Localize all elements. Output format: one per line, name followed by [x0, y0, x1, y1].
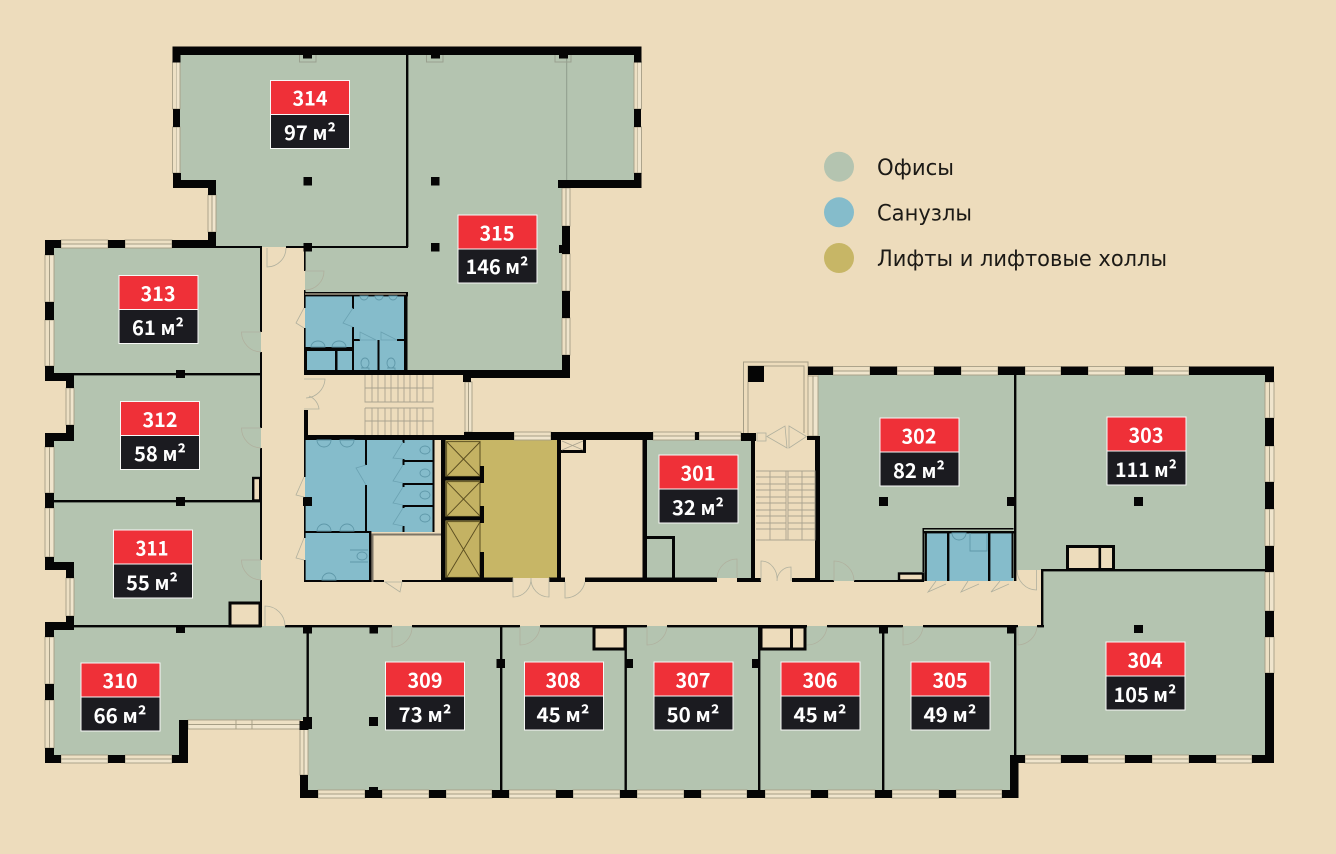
- legend item: offices: [824, 152, 954, 182]
- restroom 302 walls: [922, 528, 1014, 581]
- label 307: [654, 662, 734, 730]
- elevator shafts: [446, 442, 480, 578]
- label 313: [118, 275, 198, 344]
- legend: [824, 152, 1167, 273]
- legend item: restrooms: Санузлы: [877, 202, 972, 226]
- label 311: 55 м²: [126, 567, 178, 596]
- label 310: 310: [102, 665, 138, 694]
- label 307: 50 м²: [666, 699, 720, 728]
- room 309: [308, 626, 501, 790]
- label 312: 58 м²: [134, 438, 186, 467]
- label 301: 32 м²: [672, 492, 724, 521]
- restroom block: room 302: [926, 532, 1013, 581]
- room 308: [501, 626, 625, 790]
- stair hall glazing outline: [744, 362, 808, 433]
- room 304: [1015, 570, 1265, 755]
- gray wall lines: [305, 294, 441, 582]
- west section walls: [45, 240, 312, 763]
- label 312: 312: [142, 404, 178, 433]
- elevator hall: [445, 440, 557, 578]
- label 302: 302: [902, 420, 936, 450]
- room 310: [54, 626, 308, 755]
- label 303: 111 м²: [1115, 454, 1177, 483]
- label 304: 304: [1128, 644, 1163, 674]
- label 309: 309: [408, 664, 442, 694]
- label 314: 97 м²: [284, 117, 336, 146]
- label 308: [524, 662, 604, 730]
- stairs: [365, 375, 815, 540]
- label 311: [113, 530, 193, 598]
- label 308: 308: [546, 664, 580, 694]
- legend item: elevators and lobbies: Лифты и лифтовые холлы: [877, 247, 1167, 272]
- label 309: 73 м²: [398, 699, 452, 728]
- pilasters on top wall: [300, 55, 571, 62]
- tan room beside restrooms: [374, 536, 441, 580]
- label 311: 311: [136, 532, 168, 562]
- label 305: 49 м²: [924, 699, 976, 728]
- room 303: [1015, 375, 1265, 570]
- top section walls: [172, 46, 642, 378]
- label 313: 61 м²: [132, 312, 184, 341]
- room 311: [54, 501, 261, 626]
- east section walls: [737, 366, 1274, 627]
- label 315: 146 м²: [466, 251, 528, 280]
- legend item: offices: Офисы: [877, 156, 954, 181]
- partition line in room 315: [566, 55, 568, 180]
- label 306: 45 м²: [794, 699, 846, 728]
- label 303: [1106, 416, 1186, 486]
- label 307: 307: [676, 664, 710, 694]
- room 312: [54, 374, 261, 501]
- label 302: [880, 418, 960, 486]
- label 305: [910, 662, 990, 730]
- label 306: 306: [802, 664, 838, 694]
- room 305: [883, 626, 1015, 790]
- label 304: [1106, 642, 1186, 710]
- room 301: [647, 440, 751, 578]
- room 315: [305, 55, 634, 370]
- label 302: 82 м²: [893, 455, 945, 484]
- label 312: [120, 401, 200, 470]
- small service shaft: [562, 441, 583, 450]
- core section walls: [303, 248, 755, 582]
- label 315: [458, 214, 538, 284]
- label 310: [80, 662, 160, 732]
- label 303: 303: [1128, 420, 1164, 448]
- label 309: [385, 662, 465, 730]
- horizontal windows: [61, 240, 1252, 798]
- label 308: 45 м²: [536, 699, 590, 728]
- label 305: 305: [932, 664, 968, 694]
- legend item: elevators and lobbies: [824, 243, 1167, 273]
- label 314: 314: [292, 82, 328, 112]
- doors: [242, 248, 1037, 647]
- room 307: [625, 626, 759, 790]
- label 306: [780, 662, 860, 730]
- label 313: 313: [140, 278, 176, 307]
- room 306: [759, 626, 883, 790]
- windows: [45, 62, 1274, 798]
- room 302: [818, 375, 1015, 581]
- south section walls: [74, 611, 1274, 798]
- vertical windows: [45, 62, 1274, 775]
- room 314: [180, 55, 407, 247]
- label 301: [658, 454, 738, 524]
- restroom block: lower: [305, 440, 433, 580]
- label 310: 66 м²: [94, 700, 146, 729]
- label 314: [270, 80, 350, 149]
- legend item: restrooms: [824, 197, 972, 227]
- room 313: [54, 248, 261, 374]
- restroom block: upper: [305, 295, 404, 370]
- label 304: 105 м²: [1114, 679, 1176, 708]
- label 315: 315: [480, 218, 514, 246]
- sanitary fixtures: [311, 296, 987, 580]
- label 301: 301: [680, 458, 716, 486]
- closets: [230, 478, 1114, 649]
